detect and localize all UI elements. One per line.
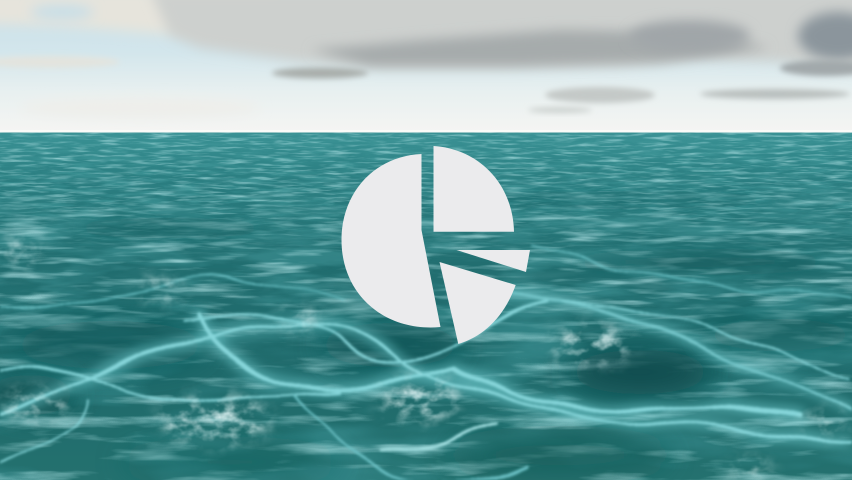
- ocean: [0, 132, 852, 480]
- water texture: distant ripples: [0, 132, 852, 258]
- dark wave troughs: [0, 195, 852, 478]
- water texture: middle swell: [0, 174, 852, 360]
- pie slice: top right segment: [434, 146, 514, 232]
- sea foam patches: [0, 232, 850, 480]
- water texture: near swell: [0, 274, 852, 480]
- pie slice: bottom segment: [440, 262, 516, 344]
- sky background: [0, 0, 852, 132]
- icon: pie chart: [342, 146, 530, 344]
- pie slice: small exploded wedge: [456, 250, 530, 272]
- pie slice: large left segment: [342, 154, 440, 327]
- wave crest glow: [0, 297, 852, 440]
- horizon line: [0, 130, 852, 132]
- clouds: [0, 0, 852, 118]
- bright wave crests: [0, 250, 852, 478]
